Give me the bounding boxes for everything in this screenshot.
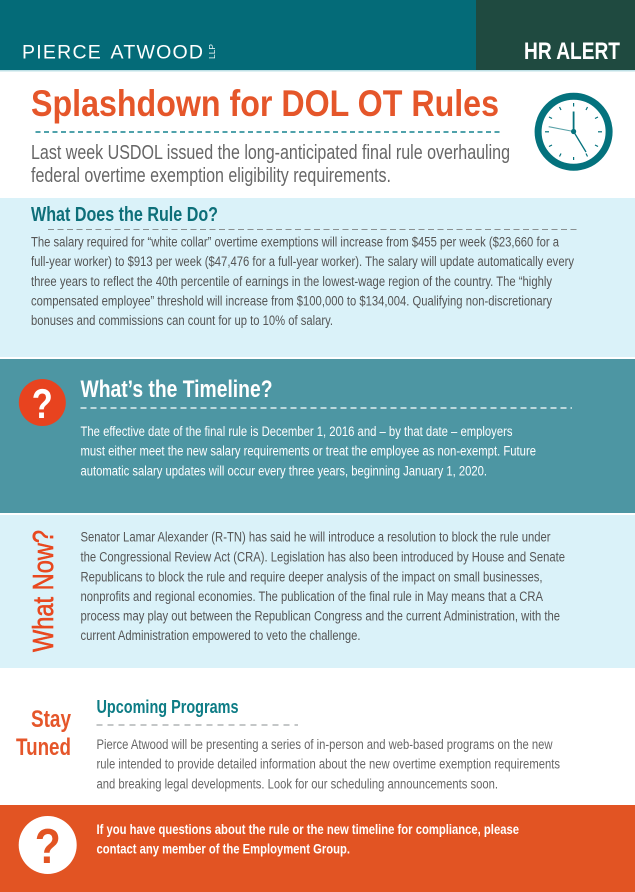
logo: Pierce Atwood LLP: PIERCE ATWOOD xyxy=(22,42,203,64)
body text: timeline: The effective date of the final rule is December 1, 2016 and – by that date – employers xyxy=(80,424,513,439)
body text: what now: Senator Lamar Alexander (R-TN) has said he will introduce a resolution to block the rule under xyxy=(80,530,551,545)
panel: what does the rule do xyxy=(0,198,635,357)
icon: question mark: ? xyxy=(32,380,53,427)
subtitle text xyxy=(31,142,510,187)
subtitle text: Last week USDOL issued the long-anticipated final rule overhauling xyxy=(31,142,510,164)
callout text: If you have questions about the rule or the new timeline for compliance, please xyxy=(96,822,519,837)
heading: what's the timeline: What’s the Timeline? xyxy=(80,376,272,403)
panel: what now xyxy=(0,515,635,668)
heading: stay tuned: Tuned xyxy=(16,734,71,761)
panel: contact callout xyxy=(0,805,635,892)
icon: question mark xyxy=(19,816,77,874)
body text: upcoming programs: and breaking legal developments. Look for our scheduling announcements soon. xyxy=(96,776,498,792)
heading: what now (rotated): What Now? xyxy=(28,530,60,652)
panel: what's the timeline xyxy=(0,359,635,513)
panel: header band xyxy=(0,0,635,72)
heading: upcoming programs: Upcoming Programs xyxy=(96,696,238,717)
icon: clock xyxy=(538,96,609,167)
body text: what now xyxy=(80,530,565,643)
icon: question mark: ? xyxy=(35,820,61,874)
callout text xyxy=(96,822,519,856)
icon: question mark xyxy=(19,379,66,427)
body text: timeline: must either meet the new salary requirements or treat the employee as non-exempt. Future xyxy=(80,444,536,459)
subtitle text: federal overtime exemption eligibility requirements. xyxy=(31,165,391,187)
body text: upcoming programs: Pierce Atwood will be presenting a series of in-person and web-based programs on the new xyxy=(96,737,553,752)
body text: what now: Republicans to block the rule and require deeper analysis of the impact on small businesses, xyxy=(80,570,542,584)
callout text: contact any member of the Employment Group. xyxy=(96,842,350,856)
body text: timeline: automatic salary updates will occur every three years, beginning January 1, 2020. xyxy=(80,464,487,479)
body text: timeline xyxy=(80,424,536,479)
heading: what does the rule do: What Does the Rule Do? xyxy=(31,204,218,226)
body text: what now: nonprofits and regional economies. The publication of the final rule in May means that a CRA xyxy=(80,589,543,604)
body text: rule details: bonuses and commissions can count for up to 10% of salary. xyxy=(31,313,333,328)
body text: rule details xyxy=(31,234,574,328)
heading: stay tuned xyxy=(16,706,72,761)
heading: stay tuned: Stay xyxy=(31,706,72,733)
logo: Pierce Atwood LLP: LLP xyxy=(208,44,217,59)
body text: what now: current Administration empowered to veto the challenge. xyxy=(80,628,360,643)
body text: upcoming programs xyxy=(96,737,560,792)
title: Splashdown for DOL OT Rules xyxy=(31,83,499,124)
